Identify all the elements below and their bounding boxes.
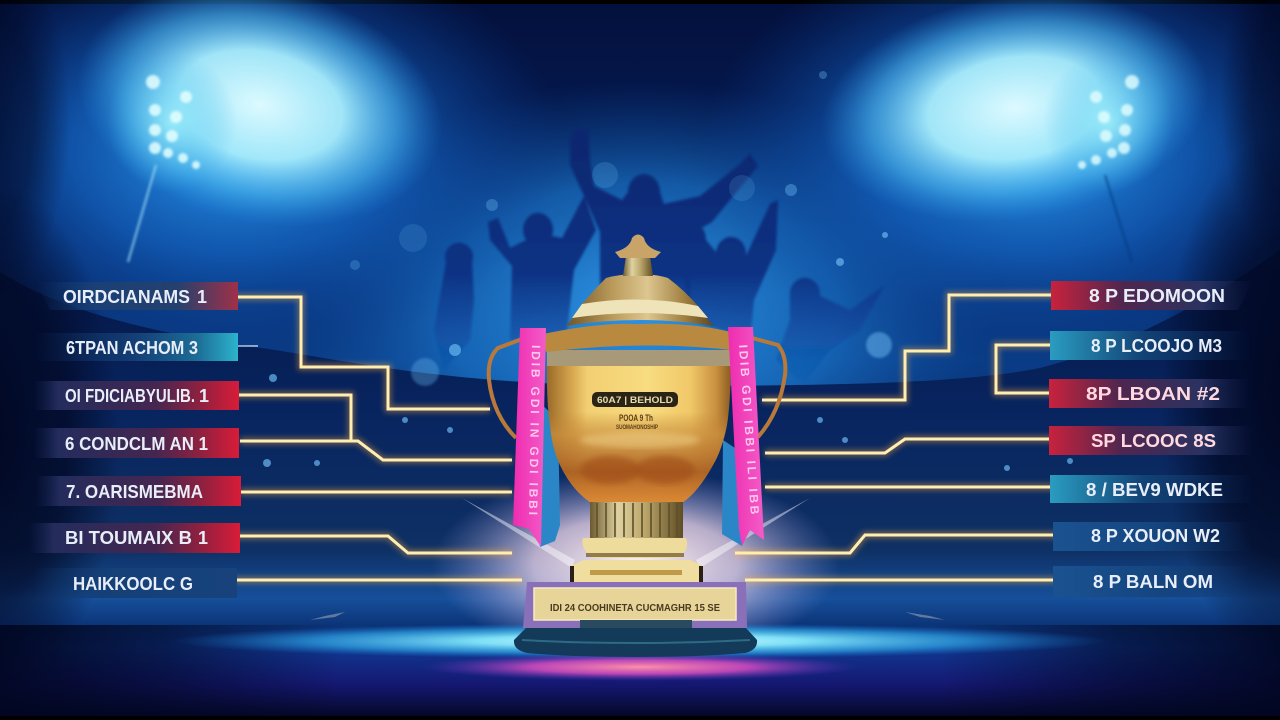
cup engraved plate: 60A7 | BEHOLD [597, 395, 674, 405]
crowd silhouettes [434, 128, 884, 385]
label 5: 7. OARISMEBMA [66, 482, 203, 502]
label 11: SP LCOOC 8S [1091, 431, 1216, 451]
trophy cup body [547, 350, 731, 502]
trophy [489, 234, 785, 657]
label 6: BI TOUMAIX B [65, 528, 192, 548]
cup engraving [616, 413, 658, 431]
player right [678, 200, 778, 340]
label 8: 8 P EDOMOON [1089, 286, 1225, 306]
label 7 [32, 568, 237, 598]
label 13 [1053, 522, 1253, 551]
label 12: 8 / BEV9 WDKE [1086, 480, 1223, 500]
trophy base [514, 582, 757, 657]
pink ribbon left: IDIB GDI IN GDI IBBI [526, 345, 543, 515]
label 10 [1049, 379, 1251, 408]
label 6: 1 [198, 528, 208, 548]
label 3: 1 [199, 386, 209, 406]
floodlight left [128, 75, 200, 262]
lower stadium stand [0, 250, 1280, 716]
label 10: 8P LBOAN #2 [1086, 384, 1220, 404]
central cheering player [570, 128, 758, 300]
pink ribbon left [513, 328, 546, 547]
cup engraving: SUOMAHONOSHIP [616, 425, 658, 431]
pink ribbon right: IDIB GDI IBBI ILI IBB [736, 344, 762, 515]
left team labels [28, 282, 241, 598]
label 4 [33, 428, 239, 458]
left bracket connector lines [205, 297, 522, 580]
label 14 [1053, 566, 1251, 597]
trophy stem [590, 502, 683, 538]
player far left [434, 243, 474, 370]
label 13: 8 P XOUON W2 [1091, 526, 1220, 546]
label 14: 8 P BALN OM [1093, 572, 1213, 592]
floodlight right [1078, 75, 1139, 262]
label 9 [1050, 331, 1252, 360]
pink ribbon right [728, 327, 764, 546]
label 1: OIRDCIANAMS [63, 287, 190, 307]
blue ribbon tails [535, 400, 742, 547]
light glow behind trophy [310, 470, 945, 660]
label 8 [1051, 281, 1254, 310]
trophy lid [543, 234, 731, 352]
label 3 [33, 381, 239, 410]
player left [488, 196, 596, 340]
floating light particles [263, 71, 1073, 471]
label 6 [28, 523, 240, 553]
label 2: 6TPAN ACHOM 3 [66, 338, 198, 358]
stadium light glow right [700, 0, 1280, 360]
cup engraving: POOA 9 Th [619, 413, 653, 423]
trophy handles [489, 338, 785, 438]
player far right [776, 278, 884, 385]
trophy base: IDI 24 COOHINETA CUCMAGHR 15 SE [550, 603, 720, 614]
label 3: OI FDICIABYULIB. [65, 386, 195, 406]
glowing stage floor [0, 623, 1280, 720]
right bracket connector lines [735, 295, 1090, 580]
label 1: 1 [197, 287, 207, 307]
stadium light glow left [0, 0, 565, 360]
label 9: 8 P LCOOJO M3 [1091, 336, 1222, 356]
label 1 [35, 282, 238, 310]
label 7: HAIKKOOLC G [73, 574, 193, 594]
label 12 [1050, 475, 1254, 503]
trophy foot [570, 538, 703, 582]
cup engraved plate [592, 392, 678, 407]
label 5 [35, 476, 241, 506]
right team labels [1049, 281, 1255, 597]
label 11 [1049, 426, 1255, 455]
label 4: 6 CONDCLM AN 1 [65, 434, 208, 454]
label 2 [33, 333, 238, 361]
